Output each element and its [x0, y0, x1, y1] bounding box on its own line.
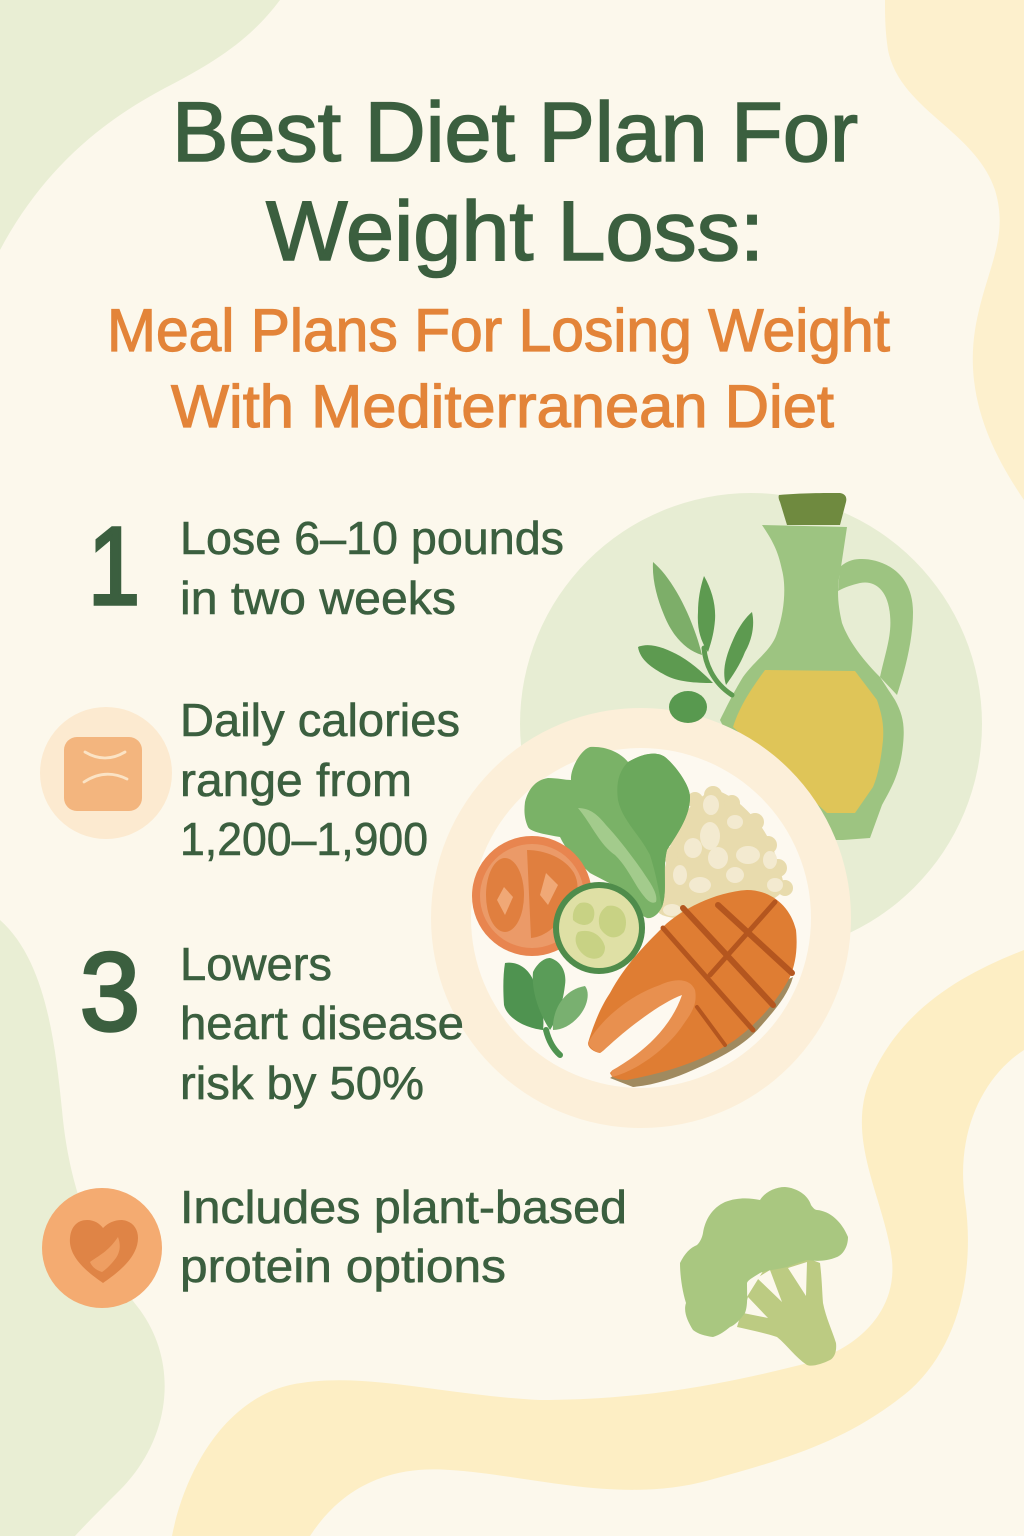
text: daily calories: range from [180, 754, 412, 806]
item 3 [80, 931, 464, 1109]
text: heart disease [180, 938, 464, 1109]
icon: heart [42, 1188, 162, 1308]
icon: olive oil bottle [720, 493, 913, 840]
text: lose pounds: in two weeks [180, 572, 456, 624]
icon: olive sprig [638, 562, 753, 695]
text: daily calories: Daily calories [180, 694, 460, 746]
title: Best Diet Plan For [172, 85, 858, 179]
text: heart disease: risk by 50% [180, 1057, 424, 1109]
icon: olive [669, 691, 707, 723]
item 1 [88, 505, 564, 628]
icon: broccoli [680, 1187, 848, 1366]
icon: lettuce [524, 747, 690, 918]
text: plant-based [180, 1181, 627, 1292]
text: plant-based: protein options [180, 1240, 506, 1292]
item 4 [42, 1181, 627, 1308]
icon: salmon [588, 890, 797, 1087]
title [172, 85, 858, 278]
backdrop circle: green [520, 493, 982, 955]
icon: cucumber [553, 882, 645, 974]
subtitle: Meal Plans For Losing Weight [107, 297, 890, 364]
number 3: 3 [80, 931, 140, 1054]
subtitle [107, 297, 890, 440]
subtitle: With Mediterranean Diet [171, 373, 834, 440]
item 2 [40, 694, 460, 865]
icon: herb [503, 958, 588, 1055]
text: heart disease: Lowers [180, 938, 332, 990]
number 1: 1 [88, 505, 140, 628]
text: lose pounds [180, 512, 564, 624]
text: daily calories: 1,200–1,900 [180, 813, 428, 865]
text: lose pounds: Lose 6–10 pounds [180, 512, 564, 564]
title: Weight Loss: [266, 184, 764, 278]
icon: tomato [472, 836, 592, 956]
plate [431, 708, 851, 1128]
text: heart disease: heart disease [180, 997, 464, 1049]
icon: orange square [40, 707, 172, 839]
text: plant-based: Includes plant-based [180, 1181, 627, 1233]
icon: rice [657, 786, 793, 918]
text: daily calories [180, 694, 460, 865]
